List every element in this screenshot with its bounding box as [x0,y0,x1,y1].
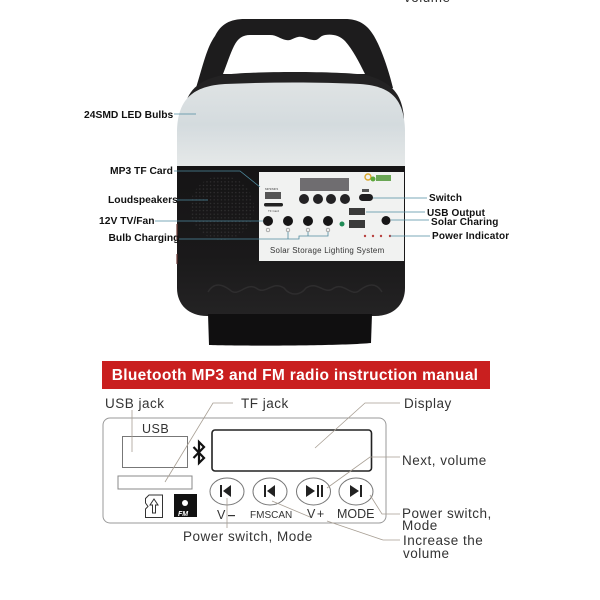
label: Display: Display [404,396,452,411]
speaker grille [190,176,254,240]
label: USB jack: USB jack [105,396,165,411]
button labels: V [217,508,226,522]
USB label and jack: USB [142,422,169,436]
control panel [259,172,404,261]
icon: bluetooth [194,442,204,463]
USB and TF slots: TF Card [268,209,279,213]
label: Power switch, Mode (right): Mode [402,518,438,533]
callout: Switch: Switch [429,193,462,204]
callout: MP3 TF Card [110,166,260,187]
button labels: V+ [307,507,326,521]
power LED [340,222,344,226]
icon: FM: FM [178,511,188,518]
USB and TF slots: MP3/MP4 [265,187,279,191]
icon: FM [174,494,197,518]
button: next [339,478,373,505]
socket pictograms [266,228,330,232]
logo [365,174,391,182]
callout: Power Indicator: Power Indicator [432,231,509,242]
panel title: Solar Storage Lighting System [270,246,385,255]
callout: Loudspeakers: Loudspeakers [108,195,178,206]
callout: Solar Charing: Solar Charing [431,217,499,228]
lower black body [177,166,405,316]
label: Power switch, Mode (left): Power switch, Mode [183,529,313,544]
product: solar lighting unit [177,19,405,346]
label: TF jack: TF jack [241,396,289,411]
leader lines [132,403,400,540]
solar socket [382,216,390,225]
LED diffuser [177,82,405,167]
callout: Solar Charing [391,217,499,228]
output sockets [263,216,333,226]
power indicators [364,235,391,237]
switch [359,189,373,201]
callout: Bulb Charging: Bulb Charging [108,233,179,244]
icon: SD card [146,495,162,518]
callout: USB Output [366,208,486,219]
callout: Power Indicator [390,231,509,242]
label: Increase the volume: Increase the [403,533,483,548]
side accent [176,224,178,264]
callout: USB Output: USB Output [427,208,486,219]
base stand [208,314,372,346]
lamp shoulder [184,72,404,130]
label: Power switch, Mode (right): Power switch, [402,506,492,521]
button labels: FMSCAN [250,510,292,521]
top buttons [299,194,350,204]
button: FMSCAN [253,478,287,505]
body ornament [208,285,382,294]
callout: MP3 TF Card: MP3 TF Card [110,166,173,177]
callout: Bulb Charging [108,232,328,244]
manual heading banner [102,361,490,389]
button labels: MODE [337,507,374,521]
LED display [300,178,349,191]
label: Increase the volume: volume [403,546,450,561]
label: Next, volume: Next, volume [402,453,487,468]
handle [196,19,393,92]
USB and TF slots [264,187,283,213]
USB label and jack [122,422,188,468]
callout: 12V TV/Fan: 12V TV/Fan [99,216,155,227]
manual heading banner: Bluetooth MP3 and FM radio instruction manual [112,367,478,384]
callout: Loudspeakers [108,195,208,206]
callout: 24SMD LED Bulbs: 24SMD LED Bulbs [84,110,174,121]
button labels [217,507,374,522]
button: previous V- [210,478,244,505]
TF slot [118,476,192,489]
button: play/pause [296,478,330,505]
callout: Switch [373,193,462,204]
USB outputs [349,208,365,228]
display [212,430,372,471]
panel diagram [103,418,386,523]
